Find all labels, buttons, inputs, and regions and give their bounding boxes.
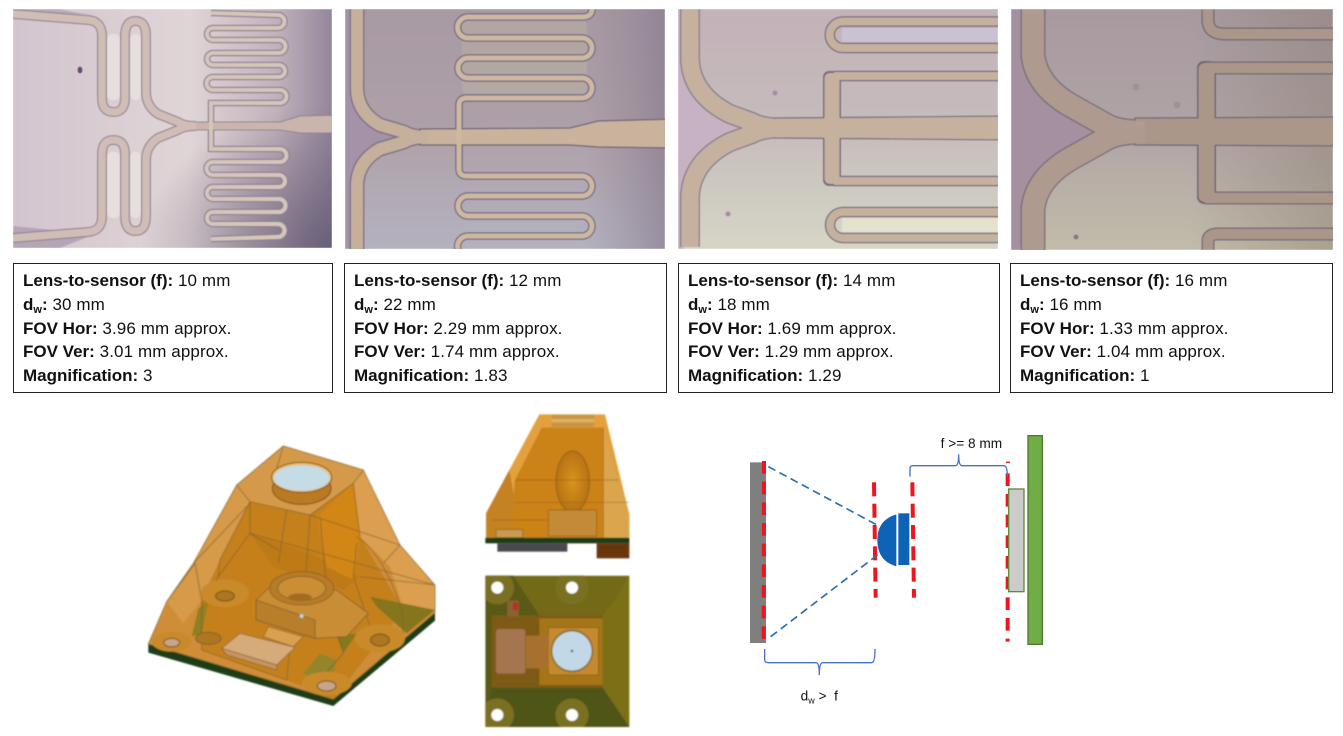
text box: f = 12 mm parameters: Magnification: 1.83	[354, 366, 508, 385]
brace: f	[910, 454, 1007, 477]
label: f >= 8 mm: f >= 8 mm	[941, 436, 1002, 451]
text box: f = 12 mm parameters: FOV Ver: 1.74 mm approx.	[354, 342, 560, 361]
text box: f = 12 mm parameters: FOV Hor: 2.29 mm approx.	[354, 319, 562, 338]
illustration: isometric 3D housing	[147, 444, 436, 707]
object plane	[750, 462, 766, 643]
text box: f = 14 mm parameters: FOV Ver: 1.29 mm approx.	[688, 342, 894, 361]
text box: f = 10 mm parameters: dw: 30 mm	[23, 295, 105, 316]
text box: f = 14 mm parameters: Lens-to-sensor (f): 14 mm	[688, 271, 895, 290]
text box: f = 10 mm parameters	[13, 263, 333, 393]
text box: f = 12 mm parameters	[344, 263, 667, 393]
text box: f = 10 mm parameters: FOV Ver: 3.01 mm approx.	[23, 342, 229, 361]
text box: f = 12 mm parameters: dw: 22 mm	[354, 295, 436, 316]
text box: f = 10 mm parameters: Lens-to-sensor (f): 10 mm	[23, 271, 230, 290]
brace: dw	[765, 649, 875, 675]
text box: f = 16 mm parameters: FOV Hor: 1.33 mm approx.	[1020, 319, 1228, 338]
red plane markers	[764, 461, 1010, 642]
text box: f = 14 mm parameters: FOV Hor: 1.69 mm approx.	[688, 319, 896, 338]
text box: f = 14 mm parameters: dw: 18 mm	[688, 295, 770, 316]
text box: f = 10 mm parameters: FOV Hor: 3.96 mm approx.	[23, 319, 232, 338]
text box: f = 14 mm parameters: Magnification: 1.29	[688, 366, 842, 385]
text box: f = 16 mm parameters: FOV Ver: 1.04 mm approx.	[1020, 342, 1226, 361]
illustration: side view of housing	[484, 413, 630, 560]
panel: microscope image, f = 16 mm	[1011, 9, 1333, 250]
sensor	[1009, 489, 1024, 592]
diagram: optical schematic	[750, 435, 1043, 706]
text box: f = 16 mm parameters	[1010, 263, 1333, 393]
label: dw > f: > f	[815, 689, 838, 704]
label: dw > f: w	[807, 696, 815, 706]
blue field-of-view lines	[768, 467, 878, 637]
lens	[877, 513, 909, 566]
text box: f = 14 mm parameters	[678, 263, 1000, 393]
circuit board	[1028, 436, 1042, 644]
panel: microscope image, f = 14 mm	[678, 9, 998, 249]
text box: f = 16 mm parameters: Lens-to-sensor (f): 16 mm	[1020, 271, 1227, 290]
illustration: bottom view of housing	[484, 574, 630, 728]
label: dw > f: d	[801, 689, 808, 704]
text box: f = 12 mm parameters: Lens-to-sensor (f): 12 mm	[354, 271, 561, 290]
panel: microscope image, f = 12 mm	[345, 9, 665, 249]
text box: f = 16 mm parameters: Magnification: 1	[1020, 366, 1150, 385]
text box: f = 10 mm parameters: Magnification: 3	[23, 366, 153, 385]
text box: f = 16 mm parameters: dw: 16 mm	[1020, 295, 1102, 316]
panel: microscope image, f = 10 mm	[13, 9, 332, 248]
